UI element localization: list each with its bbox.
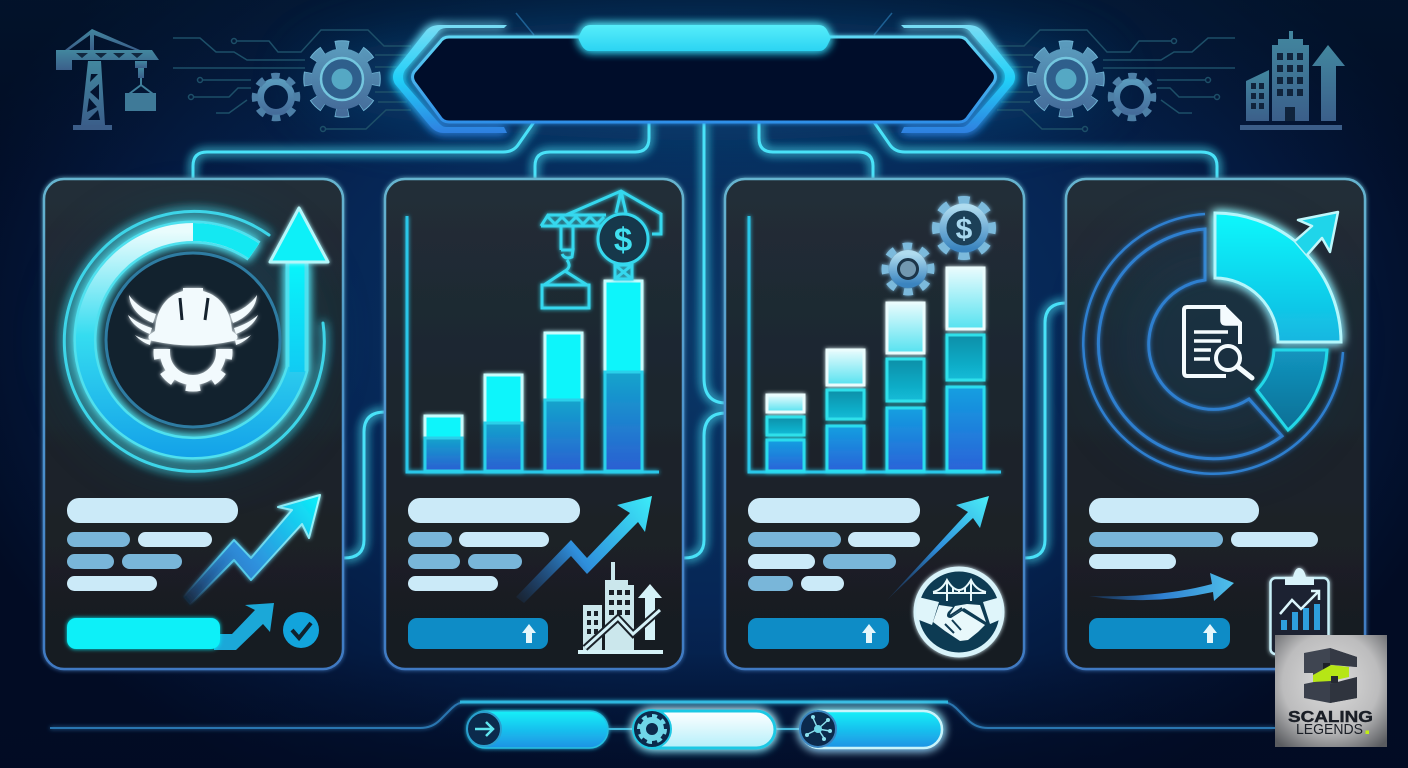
icon: crane with dollar coin: $ xyxy=(614,221,632,258)
panel 3: layered bar chart xyxy=(725,179,1024,669)
header frame xyxy=(393,13,1015,133)
icon: arrow xyxy=(467,712,501,746)
logo: Scaling Legends: SCALING xyxy=(1288,709,1373,726)
icon: dollar gear xyxy=(936,200,992,256)
crane icon: header left xyxy=(56,29,159,130)
logo: Scaling Legends: LEGENDS xyxy=(1296,721,1363,738)
call to action bar with arrow xyxy=(67,603,274,650)
logo: Scaling Legends xyxy=(1275,635,1387,747)
arrow: zigzag growth xyxy=(516,496,652,603)
icon: document with magnifier xyxy=(1184,307,1252,378)
icon: city with growth chart xyxy=(578,562,663,654)
panel 2: cost bar chart xyxy=(385,179,683,669)
text placeholder bars xyxy=(67,498,238,591)
arrow: gentle rise xyxy=(1089,573,1234,601)
footer pill 2: gear xyxy=(633,710,775,748)
donut chart with arrow xyxy=(1083,212,1343,474)
bar chart xyxy=(407,216,659,472)
icon: dollar gear: $ xyxy=(956,213,973,246)
text placeholder bars xyxy=(1089,498,1318,569)
icon: gear xyxy=(633,710,671,748)
footer pill 3: network xyxy=(800,711,942,748)
panel 4: audit donut chart xyxy=(1066,179,1365,669)
icon: network nodes xyxy=(800,711,836,747)
text placeholder bars xyxy=(748,498,920,591)
icon: crane with dollar coin xyxy=(541,191,661,308)
icon: gear xyxy=(885,246,931,292)
connector lines: header to panels xyxy=(193,122,1217,558)
text placeholder bars xyxy=(408,498,580,591)
call to action bar xyxy=(1089,618,1230,649)
icon: winged hard hat and gear xyxy=(128,288,258,388)
icon: check badge xyxy=(283,612,319,648)
city building with up arrow icon: header right xyxy=(1240,31,1345,130)
panel 1: safety identity growth ring xyxy=(44,179,343,669)
arrow: rising xyxy=(887,496,989,600)
logo accent dot xyxy=(1366,730,1369,734)
footer pill 1: arrow xyxy=(467,711,608,748)
stacked bar chart xyxy=(749,216,1001,472)
footer connector line xyxy=(50,702,1275,729)
icon: clipboard with chart xyxy=(1270,568,1328,654)
call to action bar xyxy=(748,618,889,649)
call to action bar xyxy=(408,618,548,649)
circuit lines and gears: header left xyxy=(173,30,411,132)
icon: bridge and handshake badge xyxy=(914,569,1004,655)
circular progress ring with arrow xyxy=(64,208,328,471)
arrow: zigzag growth xyxy=(183,495,320,605)
circuit lines and gears: header right xyxy=(997,30,1235,132)
